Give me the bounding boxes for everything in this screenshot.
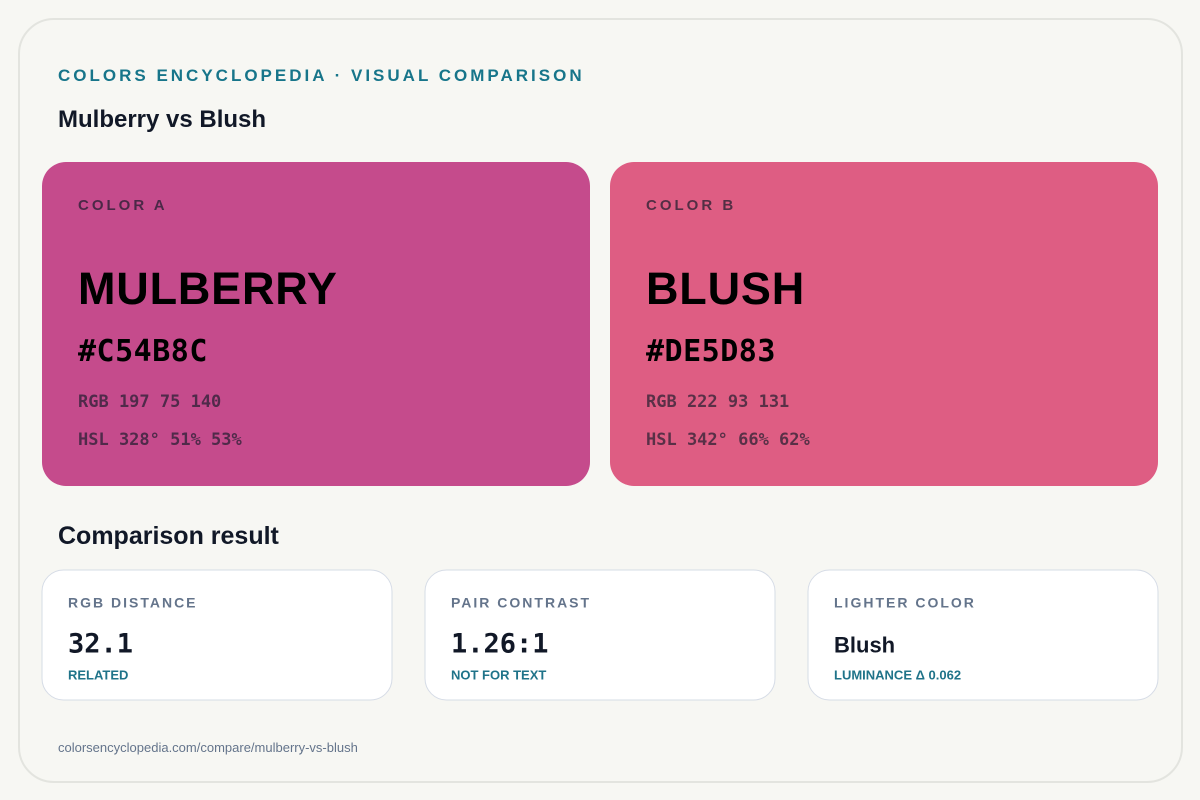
color B hex: #DE5D83 (646, 334, 776, 368)
panel: color A swatch (42, 162, 590, 486)
title: Mulberry vs Blush (58, 106, 266, 132)
color B name: BLUSH (646, 262, 805, 314)
color B hsl: HSL 342° 66% 62% (646, 430, 810, 450)
panel: pair contrast card (424, 570, 776, 700)
card note: RELATED (68, 668, 128, 682)
footer source url: colorsencyclopedia.com/compare/mulberry-vs-blush (58, 740, 358, 755)
section heading: comparison result: Comparison result (58, 522, 279, 550)
color A label: COLOR A (78, 197, 168, 214)
color B label: COLOR B (646, 197, 736, 214)
card value: 1.26:1 (451, 628, 549, 660)
card label: PAIR CONTRAST (451, 594, 591, 610)
eyebrow heading: COLORS ENCYCLOPEDIA · VISUAL COMPARISON (58, 66, 585, 85)
color A hex: #C54B8C (78, 334, 208, 368)
card label: LIGHTER COLOR (834, 594, 976, 610)
card label: RGB DISTANCE (68, 594, 198, 610)
panel: lighter color card (808, 570, 1158, 700)
color A rgb: RGB 197 75 140 (78, 392, 221, 412)
card value: 32.1 (68, 628, 133, 660)
card note: LUMINANCE Δ 0.062 (834, 668, 961, 682)
panel: RGB distance card (42, 570, 392, 700)
card note: NOT FOR TEXT (451, 668, 546, 682)
panel: color B swatch (610, 162, 1158, 486)
color A name: MULBERRY (78, 262, 338, 314)
color A hsl: HSL 328° 51% 53% (78, 430, 242, 450)
color B rgb: RGB 222 93 131 (646, 392, 789, 412)
card value: Blush (834, 632, 895, 658)
